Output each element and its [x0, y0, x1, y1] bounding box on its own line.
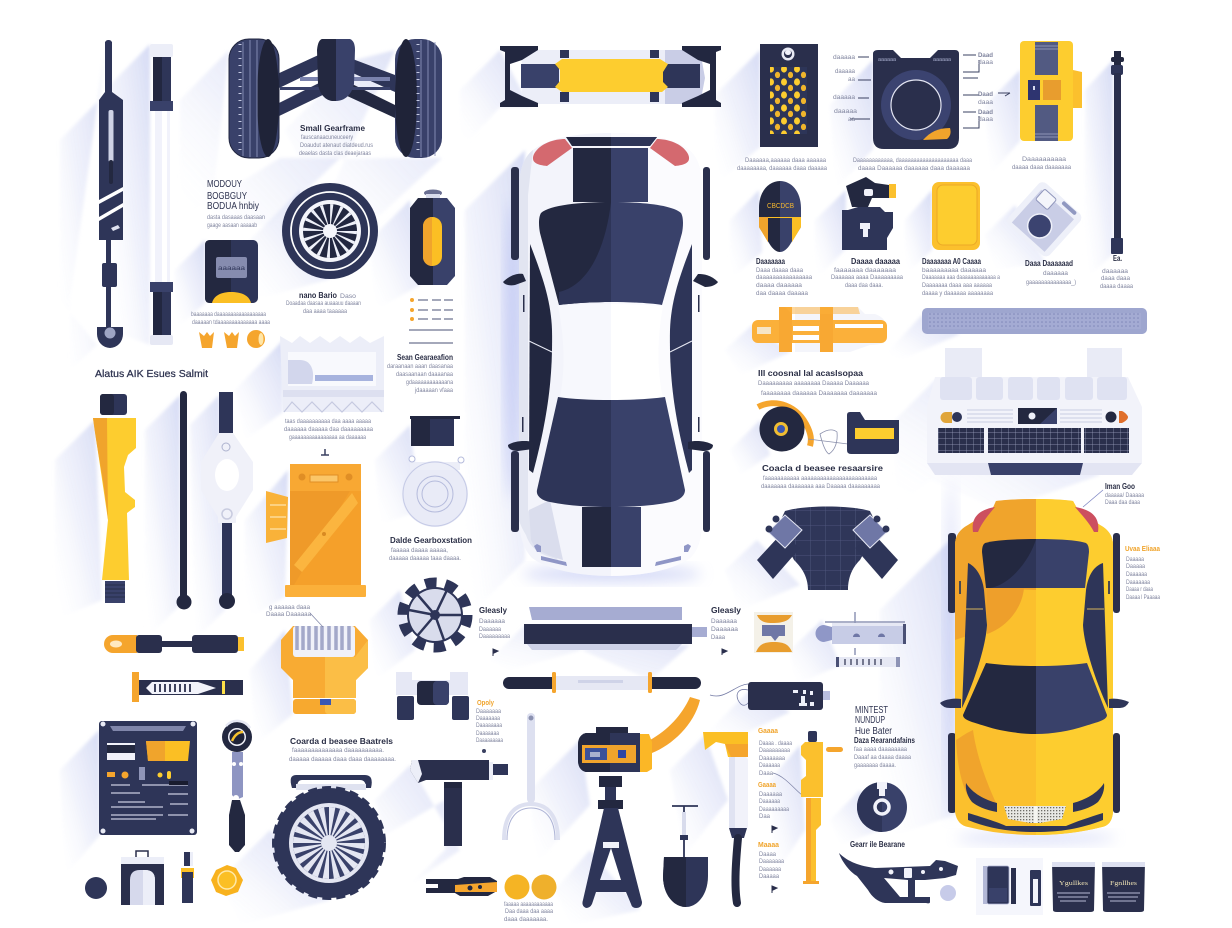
text: orange list right of car: Daaaaa [1126, 557, 1145, 563]
text: discs caption [504, 902, 554, 923]
icon: double bellows bracket [396, 672, 469, 720]
small parts row: dot, box, clip, yellow gear [85, 851, 243, 905]
text: discs caption: faaaaa aaaaaaaaaaaa [504, 902, 554, 908]
windshield [963, 663, 1107, 734]
text: gleasly left: Gleasly [479, 606, 508, 615]
text: second row captions: Daaaaaaa daaa aaa aaaaaa [922, 283, 993, 289]
tool: tall black rod [1111, 51, 1124, 254]
icon: seat harness [757, 506, 898, 590]
text: orange list near fork [476, 700, 504, 744]
icon: big tyre with bracket [274, 775, 384, 898]
rear window [539, 202, 683, 305]
text: clamp callout: Daaaa Daaaaaa [266, 612, 312, 618]
main title: Alatus AIK Esues Salmit [95, 368, 208, 380]
tool: long bar with collars [503, 672, 701, 693]
text: second row captions: daaa daa daaa. [845, 283, 883, 289]
text: model heading: dasta dasaaas daasaan [207, 215, 265, 221]
main white car, top view [503, 133, 718, 576]
text: orange lists near nozzle: Daaaaaaaaa [759, 748, 791, 754]
text: top right captions: daaaa daaa daaaaaaa [1012, 165, 1072, 171]
text: serrated part caption: gaaaaaaaaaaaaaaaa aa daaaaaa [289, 435, 367, 441]
white serrated part [280, 336, 384, 412]
text: second row captions: Daaaa daaaaa [851, 257, 901, 266]
text: orange list near fork: Daaaaaaaa [476, 723, 503, 729]
text: serrated part caption: daaaaaa daaaaa daa daaaaaaaaa [284, 427, 374, 433]
icon: jar right [1102, 862, 1145, 912]
text: small gearframe: fauscanaacuneuceery [301, 135, 353, 141]
text: disc heading: faaaaaaaaaaa aaaaaaaaaaaaaaaaaaaaaaaa [763, 476, 878, 482]
text: orange lists near nozzle: Daa [759, 814, 771, 820]
text: gleasly right: Gleasly [711, 606, 742, 615]
text: orange list near fork: Daaaaaaa [476, 716, 501, 722]
text: mintest heading: Hue Bater [855, 726, 893, 737]
text: mintest heading: Daza Rearandafains [854, 736, 915, 745]
text and callout: iman goo: Daaa daa daaa [1105, 500, 1141, 506]
text: mintest heading: faa aaaa daaaaaaaa [854, 747, 908, 753]
text: heading right of bottle: jdaaaaan vfaaa [414, 388, 454, 394]
tool: torque wrench [97, 40, 123, 348]
icon: camera with callouts: daaaaa [833, 55, 856, 61]
text: wheel caption: Daso [340, 294, 357, 300]
rear window [982, 539, 1089, 588]
text and callout: iman goo [1083, 482, 1145, 507]
tool: thin black rod [176, 391, 192, 610]
text: orange list right of car: Daaaaaa [1126, 572, 1148, 578]
text: model heading [207, 179, 265, 229]
text: discs caption: Daa daaa daa aaaa [505, 909, 554, 915]
text: orange lists near nozzle: Maaaa [758, 842, 779, 849]
text: serrated part caption: taas daaaaaaaaaa daa aaaa aaaaa [285, 419, 372, 425]
tool: white piston rod [150, 44, 173, 345]
text: second row captions: daaaa y daaaaaa aaaaaaaa [922, 291, 994, 297]
tool: small link rod [104, 635, 244, 653]
text: wheel caption: Doaadaa daasaa auaaauu daaaan [286, 301, 361, 307]
icon: tall yellow jack [801, 731, 843, 884]
icon: camera with callouts: daaaaa [835, 69, 856, 75]
icon: leopard card [760, 44, 818, 147]
text: second row captions: faaaaaaa daaaaaaa [834, 268, 897, 274]
text: big wheel heading: Coarda d beasee Baatrels [290, 737, 394, 746]
mirrors [503, 274, 718, 451]
text: second row captions: daaaa daaaaaa [756, 283, 803, 289]
icon: camera with callouts: aa [848, 117, 856, 123]
text: orange lists near nozzle: Daaaaaa [759, 792, 783, 798]
text: pump caption [389, 536, 472, 562]
text: orange lists near nozzle: Daaaaaaa [759, 756, 786, 762]
side windows [529, 244, 692, 473]
tool: labelled strip [132, 672, 243, 702]
text: orange lists near nozzle: Daaaaaaa [759, 859, 785, 865]
text: box caption: daaaaan tdaaaaaaaaaaaaaa aaaa [192, 320, 271, 326]
text: orange lists near nozzle [758, 728, 802, 893]
text: second row captions: Daaa daaaa daaa [756, 268, 804, 274]
text: orange list near fork: Opoly [477, 700, 494, 707]
axle with two tyres [229, 39, 442, 158]
text: orange lists near nozzle: Daaa [759, 771, 774, 777]
icon: tool bag [842, 177, 896, 250]
icon: helmet: CBCDCB [767, 203, 794, 210]
text: gleasly right [711, 606, 742, 655]
text: second row captions: Daaaaaaa aaa daaaaaaaaaaaaa a [922, 275, 1001, 281]
panel: front bumper [927, 348, 1142, 475]
icon: funnel cup [663, 806, 708, 907]
text: orange lists near nozzle: Gaaaa [758, 782, 776, 789]
text: orange lists near nozzle: Daaaaaa [759, 799, 781, 805]
text: second row captions: Daaaaaaa A0 Caaaa [922, 257, 981, 266]
icon: jar left [1052, 862, 1095, 912]
yellow car, top view [940, 499, 1129, 835]
icon: hourglass tile [754, 612, 793, 653]
icon: camera with callouts: Daad [978, 53, 993, 59]
text: second row captions: Ea. [1113, 254, 1122, 263]
tool: ratchet wrench [222, 721, 252, 852]
tail lights [533, 139, 689, 166]
text: second row captions: daa daaaa daaaaa [756, 291, 809, 297]
text: box caption [191, 312, 271, 326]
text: model heading: gaage aasaan aaaaab [207, 223, 258, 229]
icon: camera with callouts: aaaaaa [933, 57, 951, 63]
icon: orange multi-bar device [752, 307, 887, 352]
text: second row captions: Daaa Daaaaaad [1025, 259, 1073, 268]
icon: pale fork [504, 713, 558, 840]
text: big wheel heading [289, 737, 396, 763]
text: small gearframe: deaelas dasta clas deaejaraas [299, 151, 371, 157]
text: small gearframe [299, 124, 373, 157]
text: orange list near fork: Daaaaaaaaa [476, 738, 504, 744]
text: second row captions: daaaa daaaa [1100, 284, 1134, 290]
legend: dashes [409, 298, 453, 343]
text: orange lists near nozzle: Daaaaaa [759, 763, 781, 769]
text: mintest heading: gaaaaaaa daaaa. [854, 763, 896, 769]
text: gleasly left [479, 606, 511, 656]
icon: yellow panel [1020, 41, 1082, 141]
text: second row captions: gaaaaaaaaaaaaaa_) [1026, 280, 1076, 286]
text: clamp callout: g aaaaaa daaa [269, 605, 311, 611]
icon: alloy wheel [282, 183, 378, 279]
text: gleasly left: Daaaaaa [479, 627, 502, 633]
icon: dark box with label: aaaaaa [218, 266, 246, 272]
icon: yellow card [932, 182, 980, 250]
text: disc heading: daaaaaaa daaaaaaa aaa Daaaaa daaaaaaaaa [761, 484, 881, 490]
icon: meter with cable [710, 682, 830, 710]
hood stripe [582, 507, 611, 567]
text: gleasly left: Daaaaaa [479, 619, 506, 625]
icon: pistol grip tool [410, 749, 508, 846]
text: gleasly right: Daaaaaa [711, 619, 738, 625]
roof [558, 304, 663, 401]
text: heading right of bottle: daraanaan aaan daasanaa [387, 364, 454, 370]
icon: bottom bracket [839, 853, 958, 903]
icon: orange cabinet [266, 449, 366, 597]
text: second row captions [756, 254, 1134, 297]
icon: camera with callouts: daaaaa [833, 95, 856, 101]
text: second row captions: daaaaaaaaaaaaaaaa [756, 275, 813, 281]
text: orange device heading [758, 369, 878, 397]
text: model heading: BODUA hnbiy [207, 201, 259, 212]
text: mintest heading: MINTEST [855, 705, 888, 716]
headlights [966, 783, 1104, 812]
icons: two yellow discs [504, 874, 556, 900]
text: orange device heading: Daaaaaaaaa aaaaaaaa Daaaaa Daaaaaa [758, 381, 870, 387]
text: gleasly left: Daaaaaaaaa [479, 634, 511, 640]
icon: jar left: Ygullkes [1059, 880, 1089, 887]
icon: camera with callouts: daaaaa [834, 109, 858, 115]
text: serrated part caption [284, 419, 374, 441]
icon: dark box with label [205, 240, 258, 303]
icon: camera with callouts: daaa [978, 100, 994, 106]
text: orange list near fork: Daaaaaaa [476, 731, 500, 737]
text: orange device heading: Ill coosnal lal acaslsopaa [758, 369, 864, 378]
text: second row captions: Daaaaaa aaaa Daaaaaaaaa [831, 275, 904, 281]
text: orange lists near nozzle: Daaaaaa [759, 867, 782, 873]
icon: camera with callouts: Daad [978, 92, 993, 98]
icon: navy disc with clasp [857, 782, 907, 832]
text: box caption: baaaaaaa daaaaaaaaaaaaaaaaaa [191, 312, 267, 318]
text: orange lists near nozzle: Daaaaa [759, 874, 780, 880]
icon: navy gear [404, 584, 466, 646]
text: heading right of bottle: daasaanaan daaaanaa [396, 372, 454, 378]
text: top right captions [737, 157, 1072, 172]
panel: perforated grey bar [922, 308, 1147, 334]
text: gleasly right: Daaaaaa [711, 627, 739, 633]
icon: yellow nozzle with hose [703, 732, 748, 903]
text: clamp callout [266, 605, 323, 627]
text: top right captions: daaaaaaaa, daaaaaa daaa daaaaa [737, 166, 828, 172]
icon: disc with orange arc and battery box [758, 403, 899, 454]
text: model heading: MODOUY [207, 179, 242, 190]
text: disc heading [761, 464, 884, 490]
headlights [534, 544, 691, 566]
icon: orange comb clamp [281, 626, 368, 714]
text: wheel caption [286, 291, 361, 315]
text: pump caption: daaaaa daaaaa taaa daaaa. [389, 556, 461, 562]
icon: dark bottle [410, 190, 455, 285]
text: pump caption: faaaaa daaaa aaaaa, [391, 548, 448, 554]
text: heading right of bottle: Sean Gearaeafion [397, 353, 453, 362]
splitter [968, 813, 1103, 832]
text: orange lists near nozzle: Daaaa [759, 852, 777, 858]
text and callout: iman goo: daaaaa/ Daaaaa [1105, 493, 1145, 499]
icon: camera with callouts: daaa [978, 60, 994, 66]
text and callout: iman goo: Iman Goo [1105, 482, 1135, 491]
text: second row captions: daaa daaa [1101, 276, 1131, 282]
icon: camera with callouts: daaa [978, 117, 994, 123]
text: wheel caption: nano Bario [299, 291, 337, 300]
text: big wheel heading: faaaaaaaaaaaaaa daaaaaaaaaa. [292, 748, 384, 754]
text: second row captions: daaaaaa [1102, 269, 1129, 275]
tool: yellow grip [93, 394, 136, 603]
text: small gearframe: Doaudut atenaut diatdeud.rus [300, 143, 373, 149]
text: orange lists near nozzle: Gaaaa [758, 728, 778, 735]
icon: rail gadget [816, 612, 906, 667]
tail lights [973, 507, 1098, 532]
text: orange list right of car: Daaaaa [1126, 564, 1146, 570]
tool: white hex wrench [201, 392, 253, 609]
icon: jar right: Fgnllhes [1110, 880, 1138, 887]
text: discs caption: daaa daaaaaaa. [504, 917, 548, 923]
tool: dark clip with orange insert [426, 877, 497, 896]
icon: pale rotated camera [1005, 180, 1084, 259]
text: orange list right of car: Daaaaaaa [1126, 580, 1151, 586]
text: orange list near fork: Daaaaaaa [476, 709, 502, 715]
text: top right captions: Daaaaaa,aaaaaa daaa aaaaaa [745, 158, 827, 164]
text: second row captions: daaaaaa [1043, 271, 1069, 277]
icon: pale pump [402, 416, 468, 527]
text: orange list right of car [1125, 546, 1161, 601]
text: wheel caption: daa aaaa taaaaaa [303, 309, 348, 315]
text: mintest heading: Daaaf aa daaaa daaaa [854, 755, 912, 761]
text: orange list right of car: Uvaa Eliaaa [1125, 546, 1160, 553]
text: orange lists near nozzle: Daaaaaaaaa [759, 807, 790, 813]
side windows [962, 563, 1108, 708]
text: heading right of bottle: gdaaaaaaaaaaaana [406, 380, 454, 386]
icon: pale dot [940, 885, 956, 901]
text: pump caption: Dalde Gearboxstation [390, 536, 472, 545]
grille [1004, 806, 1066, 823]
panel: device set [976, 858, 1043, 915]
text: top right captions: Daaaaaaaaaaaa, daaaaaaaaaaaaaaaaaaaa daaa [853, 158, 973, 164]
top jig with yellow block [500, 46, 721, 107]
bar: stacked rectangles [524, 607, 707, 650]
text: top right captions: Daaaaaaaaaa [1022, 157, 1067, 163]
text: orange list right of car: Daaaa r daaa [1126, 587, 1153, 593]
text: big wheel heading: daaaaa daaaaa daaa daaa daaaaaaaa. [289, 757, 396, 763]
text: heading right of bottle [387, 353, 454, 394]
text: top right captions: daaaa Daaaaaa daaaaaa daaa daaaaaa [858, 166, 971, 172]
icon: camera with callouts: aaaaaa [878, 57, 896, 63]
text: disc heading: Coacla d beasee resaarsire [762, 464, 884, 473]
text: orange lists near nozzle: Daaaa . daaaa [759, 741, 793, 747]
text: small gearframe: Small Gearframe [300, 124, 366, 133]
text: gleasly right: Daaa [711, 635, 726, 641]
text: second row captions: Daaaaaaa [756, 257, 785, 266]
icon: camera with callouts [833, 50, 1010, 149]
text: mintest heading: NUNDUP [855, 715, 885, 726]
soft glows around the cars [505, 200, 1116, 844]
text: orange list right of car: Daaaa l Paaaaa [1126, 595, 1161, 601]
text: mintest heading [854, 705, 915, 769]
icon: camera with callouts: aa [848, 77, 856, 83]
mirrors [940, 699, 1129, 708]
text: gearr caption: Gearr ile Bearane [850, 840, 905, 849]
icon: tool board [99, 721, 197, 835]
icons: small orange crowns and ball [199, 330, 265, 348]
text: orange device heading: faaaaaaaa daaaaaa Daaaaaaa daaaaaaa [761, 391, 878, 397]
icon: helmet [759, 181, 801, 252]
windshield [537, 397, 685, 507]
icon: jack stand camera [578, 697, 700, 908]
icon: camera with callouts: Daad [978, 110, 993, 116]
text: model heading: BOGBGUY [207, 191, 247, 202]
text: second row captions: baaaaaaaaa daaaaaa [922, 268, 987, 274]
